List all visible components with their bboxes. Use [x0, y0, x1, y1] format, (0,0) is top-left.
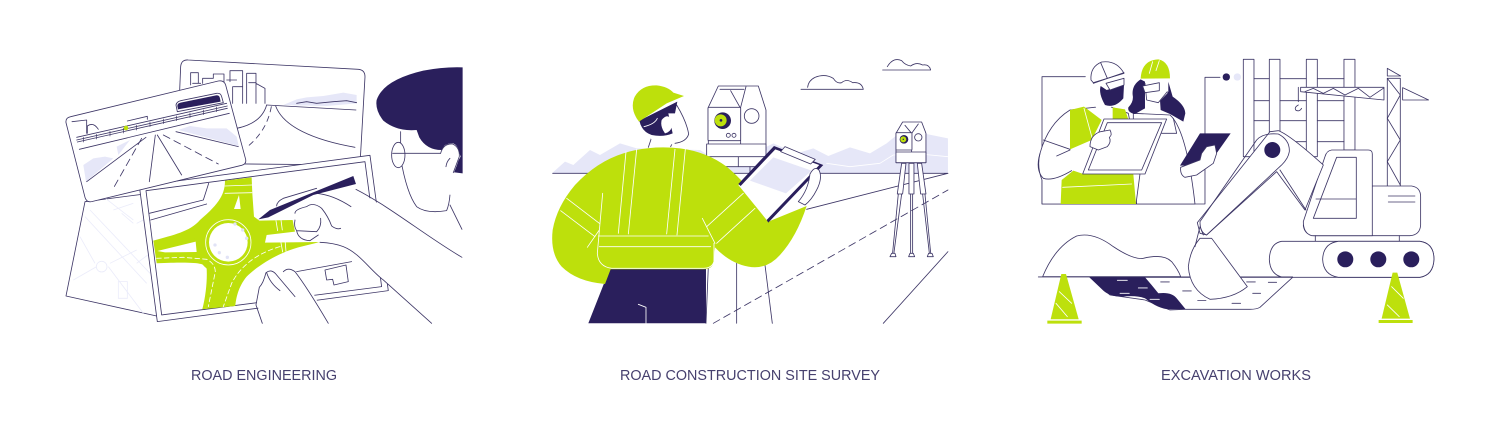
front card: roundabout plan frame [139, 155, 388, 322]
small total station on tripod [890, 122, 933, 257]
left card: highway elevation drawing [66, 81, 246, 202]
panel: road engineering illustration [66, 60, 463, 323]
male worker [1038, 62, 1140, 204]
map sheet: pale street plan [66, 193, 157, 316]
surveyor head and cap [633, 85, 689, 147]
female worker [1128, 59, 1195, 204]
excavator [1197, 131, 1434, 277]
large total station on tripod [706, 86, 772, 323]
horizon and road [553, 154, 948, 323]
clouds [801, 60, 931, 89]
hand with pen [258, 176, 462, 323]
trench with water [1089, 277, 1293, 310]
panel: excavation works illustration [1038, 59, 1434, 324]
workers window frame [1042, 77, 1220, 204]
back card: road perspective drawing [177, 60, 365, 165]
roundabout in green [153, 177, 320, 309]
tower crane [1295, 68, 1429, 187]
surveyor body in green jacket [552, 147, 807, 323]
caption: excavation works: EXCAVATION WORKS [1161, 368, 1311, 384]
clipboard and tablet [1083, 119, 1231, 177]
caption: road engineering: ROAD ENGINEERING [191, 368, 337, 384]
lower hand [256, 269, 328, 323]
caption: road construction site survey: ROAD CONSTRUCTION SITE SURVEY [620, 368, 880, 384]
panel: road construction site survey illustration [552, 60, 948, 323]
progress dots [1223, 73, 1252, 81]
engineer head with glasses [376, 67, 463, 230]
scaffolding [1243, 59, 1355, 157]
clipboard and hand [738, 146, 823, 223]
background mountains [553, 130, 948, 173]
dirt pile and ground [1038, 235, 1293, 277]
excavator bucket [1188, 227, 1247, 299]
traffic cones [1047, 273, 1413, 324]
